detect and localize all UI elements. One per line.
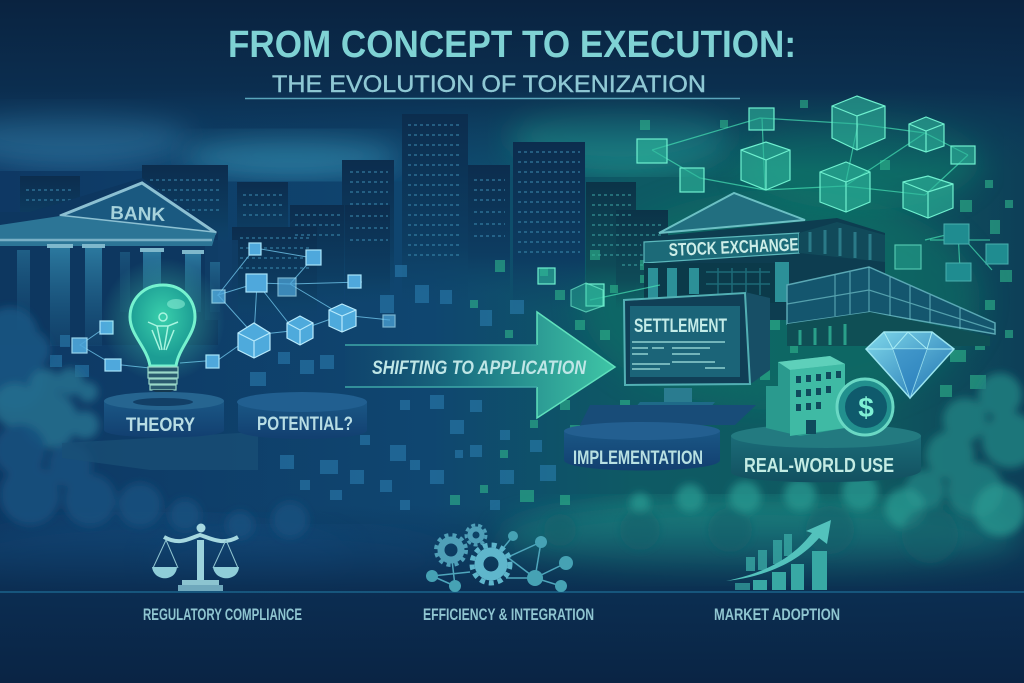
monitor: settlement: SETTLEMENT (634, 316, 727, 337)
cubes (238, 304, 356, 358)
icon: diamond (866, 332, 954, 398)
pedestal: potential: POTENTIAL? (257, 414, 353, 435)
label: market adoption: MARKET ADOPTION (714, 605, 840, 624)
icon: dollar coin: $ (858, 392, 874, 423)
pedestal: theory: THEORY (126, 415, 195, 436)
pedestal: real-world use: REAL-WORLD USE (744, 455, 894, 477)
monitor: settlement (580, 292, 770, 425)
right network of cubes (538, 96, 1008, 312)
stock exchange building: STOCK EXCHANGE (668, 234, 799, 260)
clouds left (0, 307, 308, 539)
bank label: BANK (110, 203, 166, 226)
icon: gears and network (426, 525, 573, 592)
icon: office building (766, 356, 845, 436)
stock exchange building (640, 193, 995, 346)
divider (0, 591, 1024, 593)
city skyline (20, 114, 668, 317)
glass annex (787, 267, 995, 346)
arrow: shifting to application (345, 312, 615, 418)
pedestal: real-world use (731, 424, 921, 482)
icon: scales (152, 524, 239, 591)
pedestal: implementation: IMPLEMENTATION (573, 448, 703, 469)
arrow: shifting to application: SHIFTING TO APPLICATION (372, 358, 587, 379)
pedestal: potential (237, 392, 367, 439)
icon: light bulb (101, 258, 225, 396)
cubes top (538, 96, 975, 312)
label: efficiency & integration: EFFICIENCY & INTEGRATION (423, 605, 594, 624)
left network of cubes (72, 243, 395, 371)
title: FROM CONCEPT TO EXECUTION: (228, 24, 796, 66)
pedestal: theory (62, 392, 258, 470)
bank building (0, 178, 238, 346)
clouds right (544, 373, 1024, 563)
icon: dollar coin (837, 379, 893, 435)
label: regulatory compliance: REGULATORY COMPLIANCE (143, 605, 302, 624)
digital pixel field (50, 100, 1013, 510)
subtitle: THE EVOLUTION OF TOKENIZATION (272, 71, 706, 98)
icon: growth chart (726, 520, 831, 590)
pedestal: implementation (564, 422, 720, 470)
